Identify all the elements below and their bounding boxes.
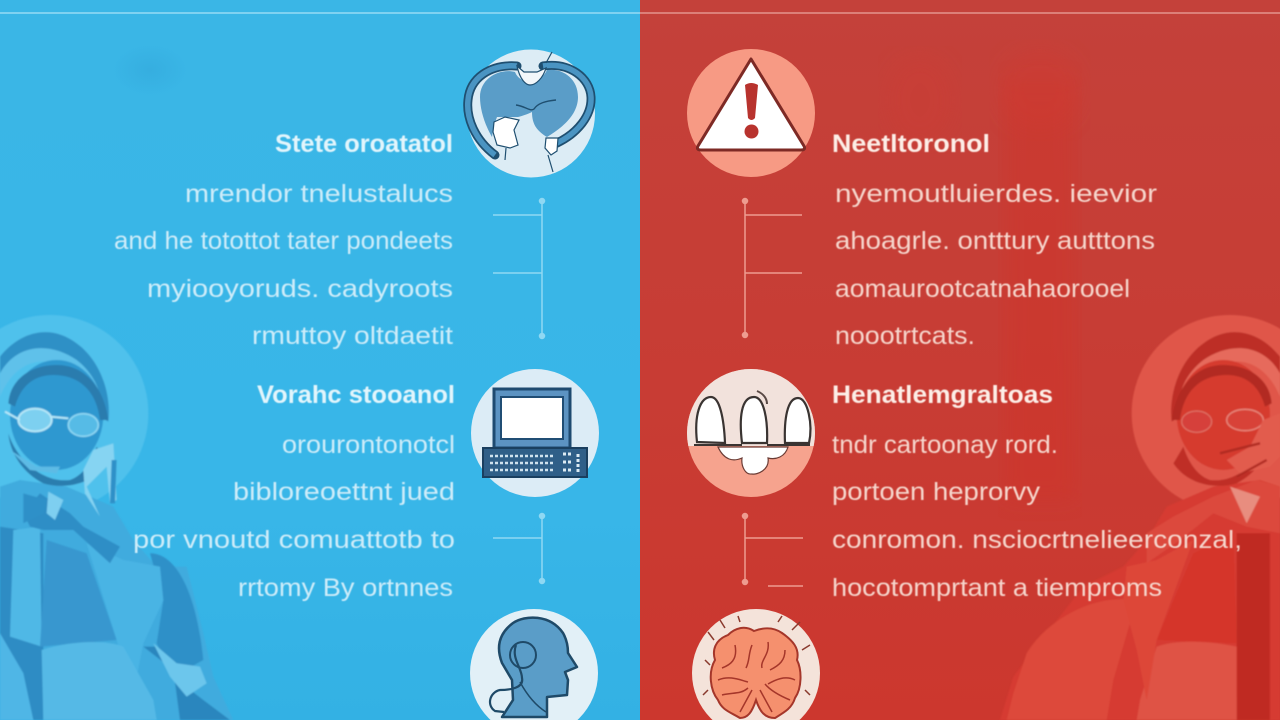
text block: left bottom: orourontonotcl [282,431,455,459]
icon: computer in circle [471,369,599,497]
text block: right top: aomaurootcatnahaorooel [835,275,1130,303]
text block: left top: and he totottot tater pondeets [114,227,453,255]
text block: right bottom: hocotomprtant a tiemproms [832,574,1162,602]
icon: warning triangle in circle [687,49,815,177]
connector: left bottom [493,514,544,584]
panel: right red background [640,0,1280,720]
text block: right top: ahoagrle. ontttury autttons [835,227,1155,255]
connector: left top [493,198,544,338]
text block: right top: noootrtcats. [835,322,975,350]
text block: right bottom: conromon. nsciocrtnelieerconzal, [832,526,1242,554]
text block: right bottom: portoen heprorvy [832,478,1041,506]
text block: left bottom: rrtomy By ortnnes [238,574,453,602]
text block: right bottom: Henatlemgraltoas [832,381,1053,409]
text block: right bottom: tndr cartoonay rord. [832,431,1058,459]
text block: left top: mrendor tnelustalucs [185,180,453,208]
icon: teeth in circle [687,369,815,497]
panel: left blue background [0,0,640,720]
text block: left bottom: Vorahc stooanol [257,381,455,409]
connector: right top [742,198,802,338]
icon: head profile in circle [470,609,598,720]
text block: left bottom: por vnoutd comuattotb to [133,526,455,554]
icon: brain in circle [692,609,820,720]
text block: left top [114,130,453,350]
text block: left bottom [133,381,455,602]
icon: heart shaped organ in circle [467,50,595,178]
figure: right person silhouette [1000,315,1280,720]
text block: right top: nyemoutluierdes. ieevior [835,180,1157,208]
text block: left top: rmuttoy oltdaetit [252,322,453,350]
connector: right bottom [742,514,803,586]
figure: left person silhouette [0,315,233,720]
text block: right bottom [832,381,1242,602]
text block: left top: myiooyoruds. cadyroots [147,275,453,303]
text block: right top [832,130,1157,350]
text block: right top: Neetltoronol [832,130,990,158]
text block: left top: Stete oroatatol [275,130,453,158]
text block: left bottom: bibloreoettnt jued [233,478,455,506]
